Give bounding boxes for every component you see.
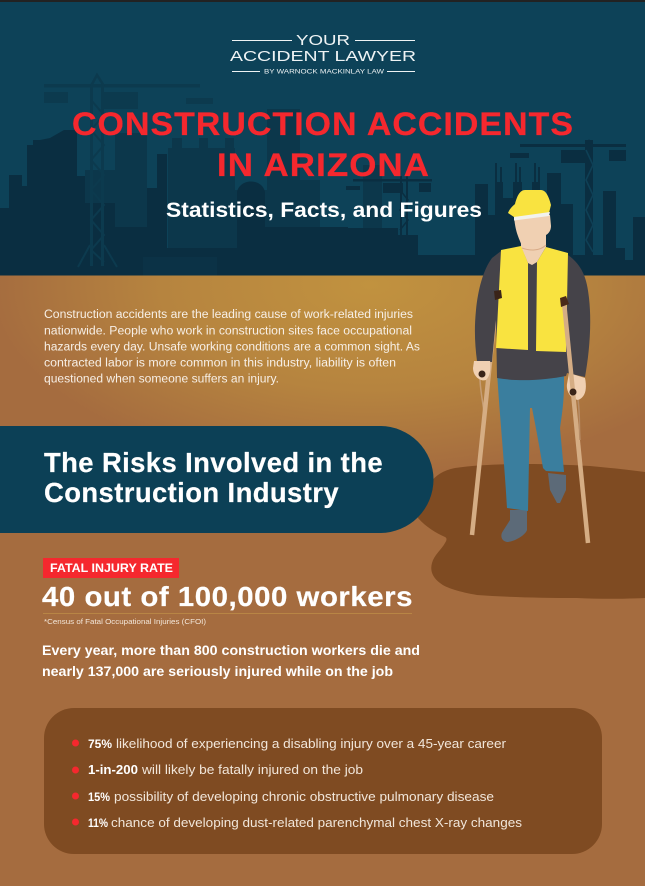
title: CONSTRUCTION ACCIDENTS [72, 106, 574, 142]
section banner [0, 426, 434, 533]
right crutch [560, 296, 588, 543]
bullet list: 11% [88, 816, 108, 830]
trousers [497, 372, 564, 511]
left crutch grip [478, 290, 502, 378]
logo: YOUR [296, 32, 350, 49]
title [72, 106, 574, 183]
right boot [548, 473, 566, 503]
shirt and arms [475, 251, 590, 380]
bullet list: possibility of developing chronic obstructive pulmonary disease [114, 789, 494, 804]
summary statement: nearly 137,000 are seriously injured while on the job [42, 664, 393, 679]
intro paragraph: nationwide. People who work in construction sites face occupational [44, 326, 412, 338]
left boot [501, 510, 527, 542]
bullet list [72, 736, 523, 830]
header panel with skyline [0, 0, 645, 276]
hat band [514, 212, 550, 220]
ground shadow [418, 464, 645, 599]
logo: ACCIDENT LAWYER [230, 48, 416, 65]
title: IN ARIZONA [217, 147, 430, 183]
bullet list: chance of developing dust-related parenchymal chest X-ray changes [111, 815, 523, 830]
intro paragraph [44, 309, 420, 386]
bullet list: 15% [88, 790, 110, 804]
section banner: The Risks Involved in the [44, 447, 383, 478]
fatal injury rate badge [43, 558, 179, 578]
summary statement [42, 643, 420, 679]
hard hat [508, 190, 551, 217]
logo: BY WARNOCK MACKINLAY LAW [264, 70, 384, 76]
intro paragraph: contracted labor is more common in this industry, liability is often [44, 358, 396, 370]
panel: risk statistics [44, 708, 602, 854]
bullet list: 75% [88, 737, 112, 751]
fatal injury rate badge: FATAL INJURY RATE [50, 563, 173, 575]
skyline front layer [0, 130, 645, 276]
headline statistic: 40 out of 100,000 workers [42, 581, 413, 612]
icon: middle crane [346, 176, 432, 236]
intro background glow [0, 275, 645, 475]
left hand [473, 361, 490, 380]
safety vest [496, 246, 568, 352]
intro paragraph: questioned when someone suffers an injury. [44, 374, 279, 386]
summary statement: Every year, more than 800 construction workers die and [42, 643, 420, 658]
face [514, 215, 551, 249]
icon: left crane [44, 75, 213, 267]
right hand [567, 373, 586, 400]
icon: right crane [510, 139, 626, 163]
left crutch [472, 295, 497, 535]
source note: *Census of Fatal Occupational Injuries (CFOI) [44, 617, 207, 626]
chin shadow [522, 245, 546, 250]
intro paragraph: Construction accidents are the leading cause of work-related injuries [44, 309, 413, 321]
worker on crutches [472, 190, 590, 543]
skyline back layer [85, 109, 382, 276]
logo [230, 32, 416, 76]
subtitle: Statistics, Facts, and Figures [166, 198, 482, 222]
bullet list: 1-in-200 [88, 762, 138, 777]
section banner: Construction Industry [44, 477, 339, 508]
neck [521, 240, 546, 265]
bullet list: will likely be fatally injured on the job [141, 762, 363, 777]
bullet list: likelihood of experiencing a disabling injury over a 45-year career [116, 736, 507, 751]
intro paragraph: hazards every day. Unsafe working conditions are a common sight. As [44, 342, 420, 354]
